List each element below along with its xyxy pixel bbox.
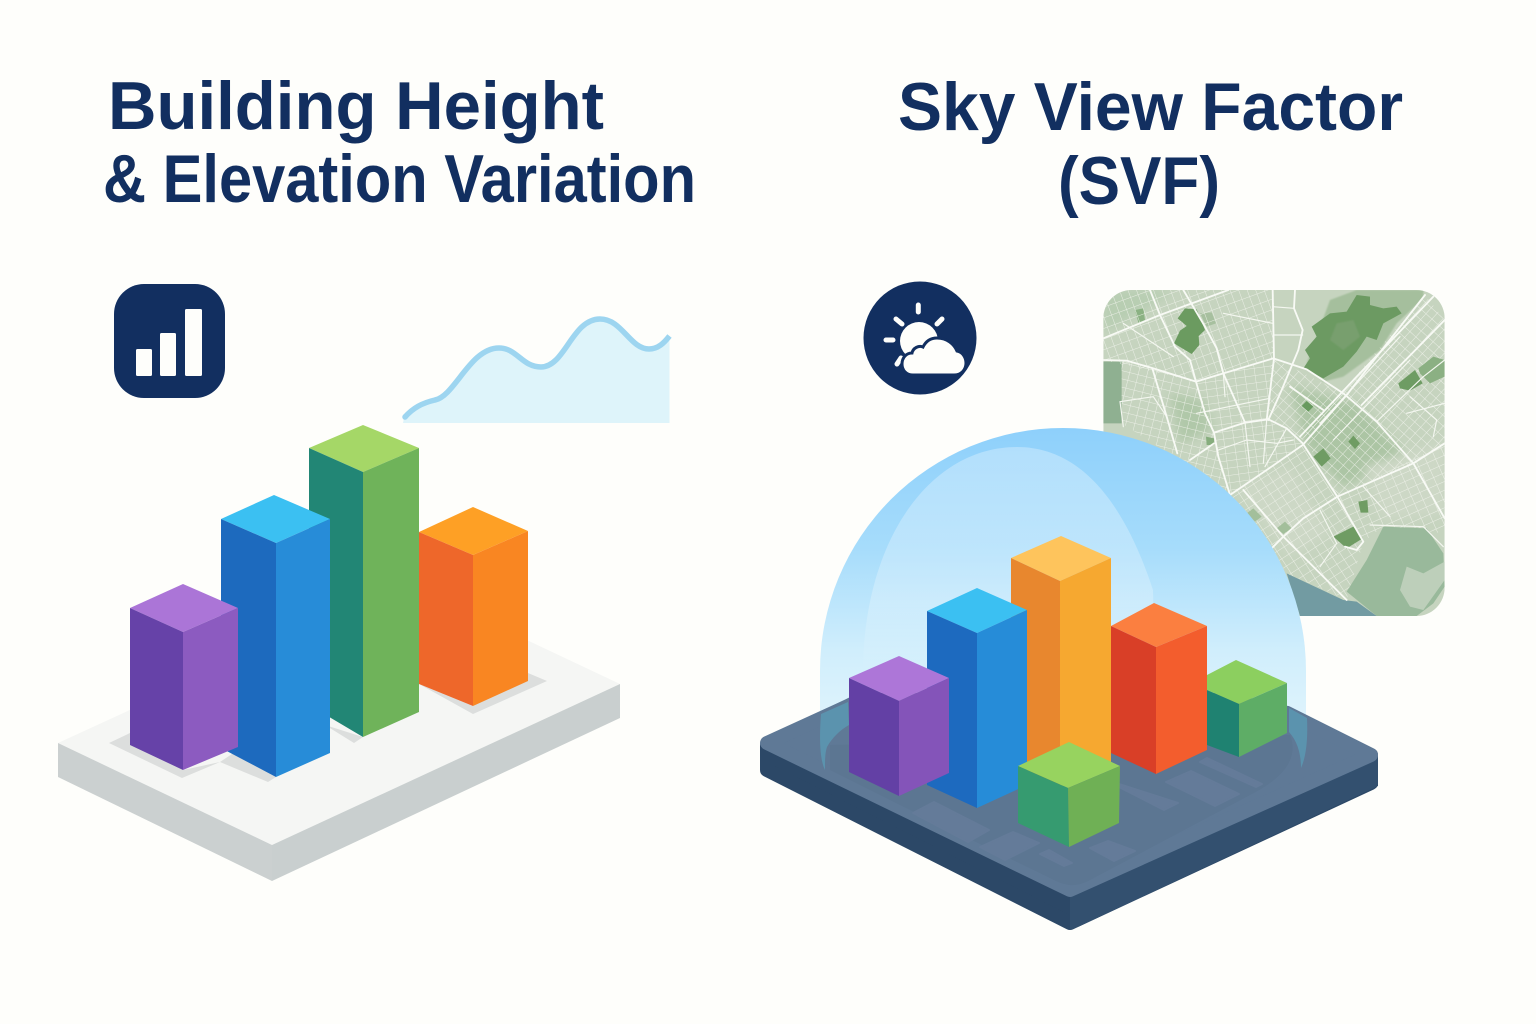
building: small green block, right — [1207, 660, 1287, 757]
bar: purple building — [130, 584, 238, 770]
title: building height and elevation variation: Building Height — [108, 68, 604, 144]
chart: elevation profile — [402, 319, 670, 423]
bar: blue building — [221, 495, 330, 777]
isometric platform: building height — [58, 583, 620, 881]
icon: bar chart badge — [114, 284, 225, 398]
title: building height and elevation variation — [103, 68, 696, 217]
dome base reflection — [820, 702, 1307, 770]
building: purple block — [849, 656, 949, 796]
title: sky view factor — [898, 69, 1403, 219]
title: building height and elevation variation: & Elevation Variation — [103, 141, 696, 217]
icon: sun and cloud badge — [864, 282, 976, 394]
building: green cube, front — [1018, 742, 1120, 847]
city platform: sky view factor — [767, 700, 1378, 930]
building: blue tower — [927, 588, 1027, 808]
bar: orange building — [419, 507, 528, 706]
city green-space map — [1103, 290, 1445, 616]
title: sky view factor: (SVF) — [1058, 143, 1220, 219]
title: sky view factor: Sky View Factor — [898, 69, 1403, 145]
sky dome — [820, 428, 1306, 770]
bar: green building — [309, 425, 419, 737]
building: red tower — [1111, 603, 1207, 774]
building: orange tower — [1011, 536, 1111, 787]
